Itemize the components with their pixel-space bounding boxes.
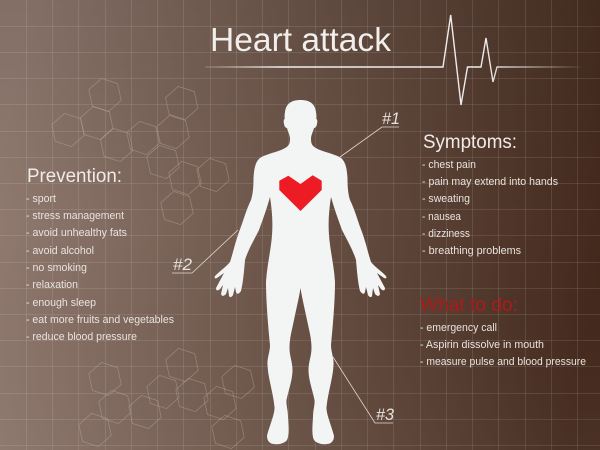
- prevention list: - avoid unhealthy fats: [26, 227, 127, 239]
- prevention heading: Prevention:: [27, 166, 122, 187]
- symptoms list: - pain may extend into hands: [422, 176, 558, 188]
- symptoms list: - dizziness: [422, 228, 470, 240]
- callout #3: #3: [376, 405, 395, 424]
- prevention list: - relaxation: [26, 279, 78, 291]
- prevention list: - eat more fruits and vegetables: [26, 314, 174, 326]
- symptoms list: - nausea: [422, 211, 462, 223]
- hexagon pattern: upper left: [52, 78, 229, 225]
- what to do list: - measure pulse and blood pressure: [420, 356, 586, 368]
- callout #2: [172, 230, 238, 274]
- panel: prevention: [26, 166, 174, 343]
- heartbeat line: [205, 15, 580, 105]
- what to do list: - emergency call: [420, 322, 497, 334]
- symptoms list: [422, 159, 558, 257]
- what to do list: [420, 322, 586, 368]
- prevention list: - enough sleep: [26, 297, 96, 309]
- prevention list: - sport: [26, 193, 56, 205]
- callout #1: #1: [382, 109, 400, 128]
- prevention list: - reduce blood pressure: [26, 331, 137, 343]
- panel: what to do: [420, 295, 586, 368]
- prevention list: - avoid alcohol: [26, 245, 94, 257]
- title: Heart attack: [210, 22, 391, 59]
- callout #1: [340, 109, 400, 157]
- symptoms heading: Symptoms:: [423, 132, 517, 153]
- panel: symptoms: [422, 132, 558, 257]
- callout #2: #2: [173, 255, 193, 274]
- callout #3: [333, 357, 395, 424]
- symptoms list: - sweating: [422, 193, 470, 205]
- prevention list: - stress management: [26, 210, 124, 222]
- prevention list: [26, 193, 174, 343]
- heart icon: [279, 175, 322, 211]
- symptoms list: - breathing problems: [422, 245, 521, 257]
- what to do list: - Aspirin dissolve in mouth: [420, 339, 544, 351]
- prevention list: - no smoking: [26, 262, 87, 274]
- what to do heading: What to do:: [420, 295, 518, 316]
- hexagon pattern: lower left: [79, 348, 254, 449]
- symptoms list: - chest pain: [422, 159, 476, 171]
- human body silhouette: [215, 100, 386, 444]
